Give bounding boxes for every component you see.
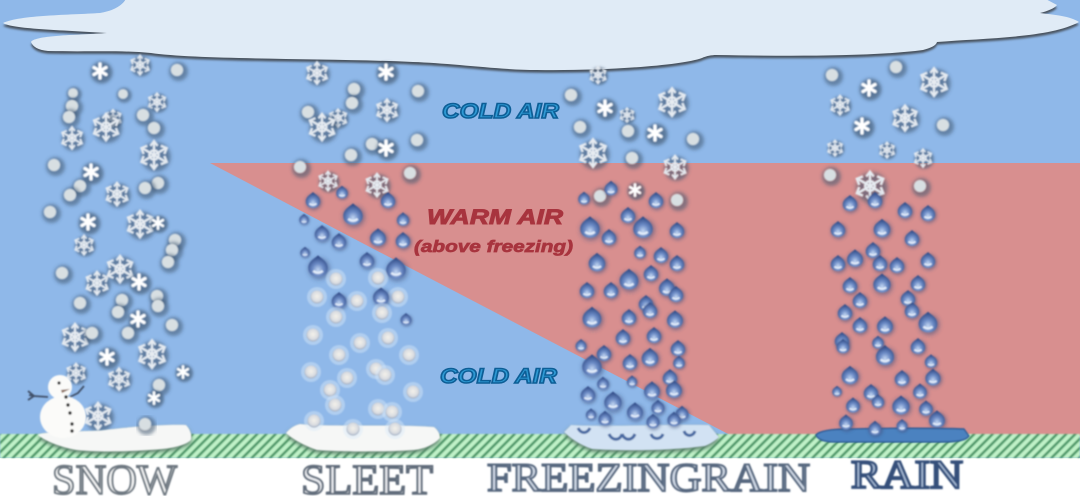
- sleet pile: [286, 411, 440, 454]
- label: cold air upper: COLD AIR: [442, 100, 560, 123]
- ground hatch: [0, 434, 1080, 458]
- snow pile: [38, 425, 191, 454]
- snowflake on snow pile: [137, 416, 156, 435]
- ice sheet: [564, 411, 719, 453]
- snowman: [28, 375, 86, 438]
- column: freezing rain: [563, 67, 704, 422]
- label: rain: RAIN: [851, 452, 963, 496]
- label: above freezing: (above freezing): [414, 237, 573, 256]
- label: cold air lower: COLD AIR: [440, 365, 558, 388]
- rain puddle: [816, 414, 969, 442]
- column: sleet: [292, 62, 429, 422]
- cloud: [3, 0, 1079, 73]
- warm air wedge: [210, 163, 1080, 436]
- label: warm air: WARM AIR: [427, 206, 564, 229]
- column: snow: [42, 55, 193, 432]
- column: rain: [822, 59, 954, 430]
